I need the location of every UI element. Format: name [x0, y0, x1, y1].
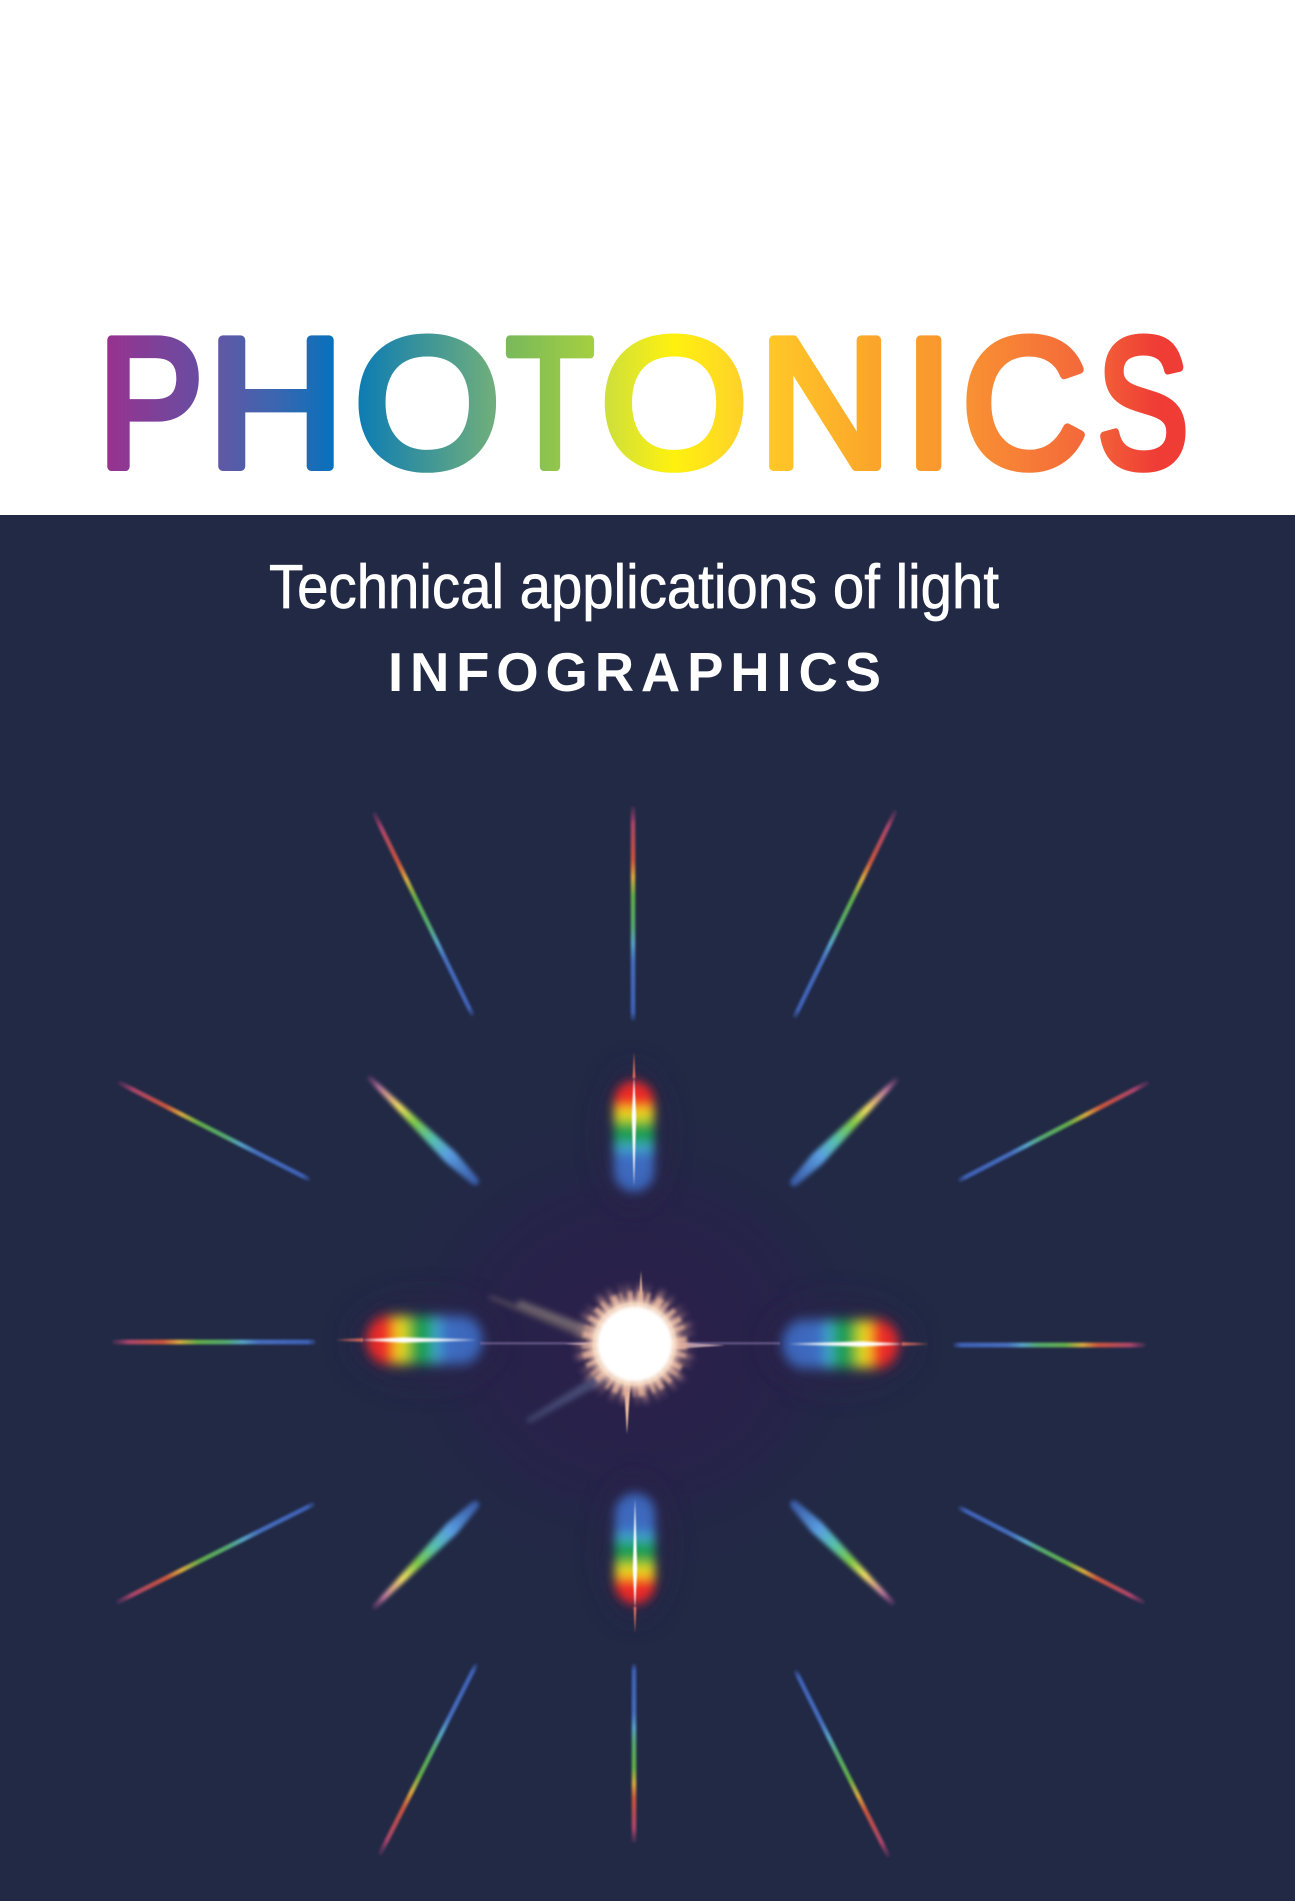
- title: PHOTONICS: O: [600, 300, 748, 506]
- title: PHOTONICS: C: [962, 300, 1087, 506]
- title: PHOTONICS: S: [1097, 301, 1188, 506]
- starburst illustration: [112, 806, 1150, 1858]
- horizontal flare through the source: [480, 1339, 780, 1351]
- heading: INFOGRAPHICS: INFOGRAPHICS: [388, 642, 881, 703]
- white header background: [0, 0, 1295, 515]
- light source core: [584, 1271, 684, 1434]
- four tapered diagonal rays: [364, 1072, 902, 1613]
- navy panel background: [0, 515, 1295, 1901]
- dark glow behind the light source: [344, 1084, 924, 1604]
- four spectral blobs: [336, 1052, 929, 1633]
- title: PHOTONICS: O: [354, 301, 500, 506]
- title: PHOTONICS: H: [207, 300, 345, 506]
- title: PHOTONICS: P: [98, 301, 203, 506]
- subtitle: Technical applications of light: [269, 553, 999, 622]
- title: PHOTONICS: I: [904, 301, 953, 506]
- title: PHOTONICS: N: [758, 301, 892, 506]
- outer ring of thin spectral rays: [112, 806, 1150, 1858]
- title: PHOTONICS: [98, 300, 1188, 506]
- lens streaks from the source: [488, 1295, 612, 1423]
- title: PHOTONICS: T: [506, 300, 594, 506]
